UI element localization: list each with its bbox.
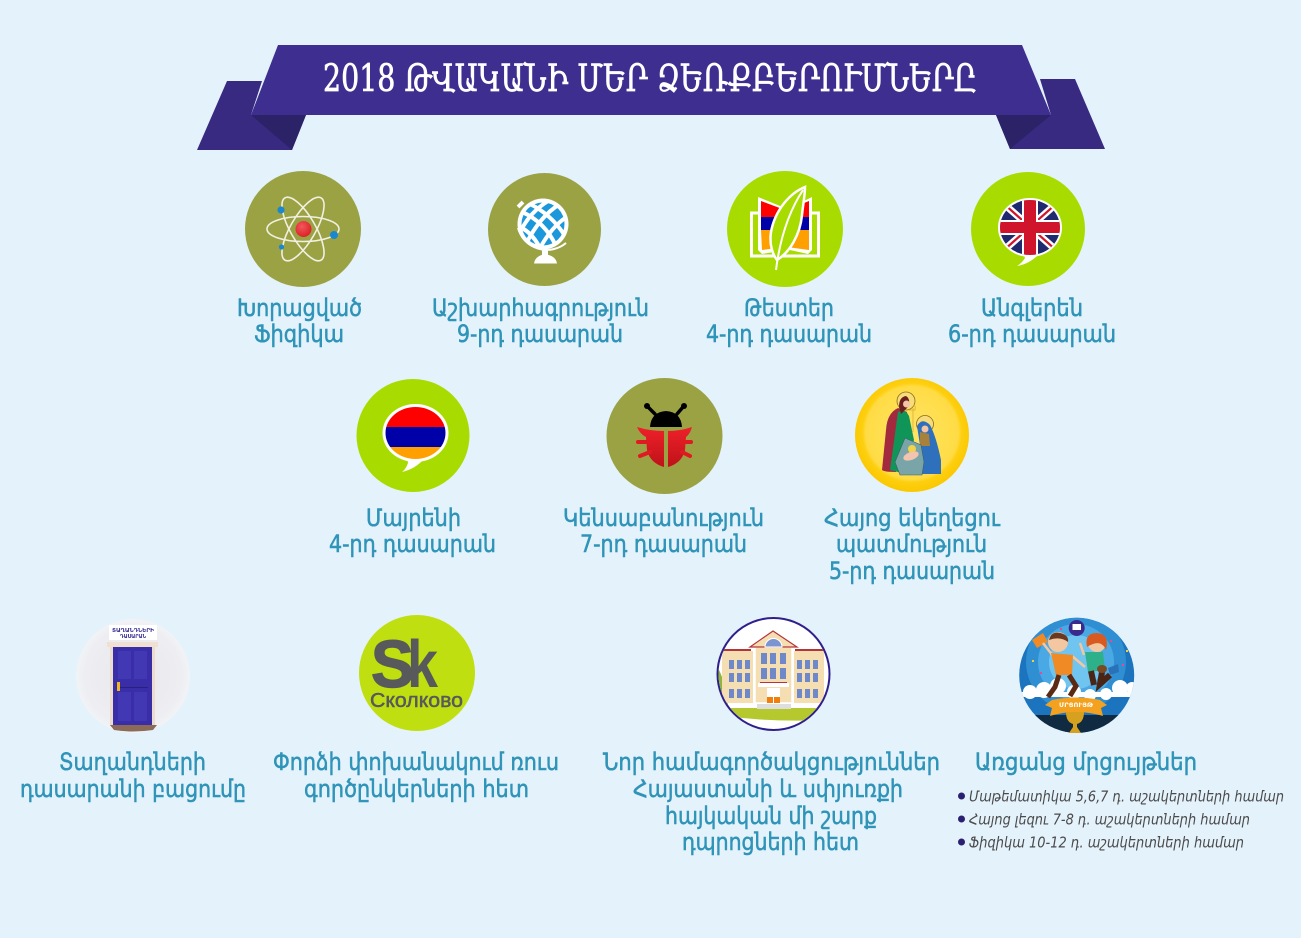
icon: door: ԴԱՍԱՐԱՆ [120,634,146,640]
icon: Skolkovo logo [359,615,475,731]
label: Կենսաբանություն [563,504,764,532]
bullet list: Ֆիզիկա 10-12 դ. աշակերտների համար [969,834,1244,852]
icon: British flag speech bubble [971,172,1085,286]
label [563,504,764,558]
label: 6-րդ դասարան [948,320,1116,348]
icon: school building [718,618,830,730]
item: Skolkovo exchange [273,615,559,803]
item: geography [432,173,649,348]
label: Աշխարհագրություն [432,294,649,322]
title banner [197,45,1105,150]
label [20,748,246,803]
label: Նոր համագործակցություններ [603,748,940,776]
label: հայկական մի շարք [665,802,877,830]
label [273,748,559,803]
item: talent class [20,619,246,803]
label: Մայրենի [366,504,461,532]
label: Թեստեր [744,294,834,322]
title: 2018 ԹՎԱԿԱՆԻ ՄԵՐ ՁԵՌՔԲԵՐՈՒՄՆԵՐԸ [323,57,977,100]
label: Փորձի փոխանակում ռուս [273,748,559,776]
item: mother tongue [329,379,496,558]
label: Ֆիզիկա [254,320,344,348]
label: պատմություն [836,530,987,558]
label: Անգլերեն [981,294,1083,322]
item: church history [824,378,1000,585]
label: Տաղանդների [59,748,206,776]
label: դասարանի բացումը [20,775,246,803]
label: գործընկերների հետ [304,775,529,803]
icon: book and feather [727,171,843,287]
icon: holy family [855,378,969,492]
item: online competitions [958,612,1284,852]
item: texts [706,171,872,348]
item: English [948,172,1116,348]
label: 4-րդ դասարան [329,530,496,558]
icon: door [76,619,190,733]
label [603,748,940,856]
label [706,294,872,348]
icon: Skolkovo logo: k [407,627,439,702]
label: 7-րդ դասարան [580,530,747,558]
icon: jumping kids: ՄՐՑՈՒՅԹ [1059,701,1093,709]
label: դպրոցների հետ [682,828,859,856]
icon: Armenian flag speech bubble [356,379,470,492]
icon: ladybug [606,378,722,494]
heading: Առցանց մրցույթներ [975,748,1197,776]
label: Հայոց եկեղեցու [824,504,1000,532]
item: advanced physics [237,171,362,348]
bullet list: Հայոց լեզու 7-8 դ. աշակերտների համար [969,810,1250,828]
icon: globe [488,173,601,286]
icon: jumping kids [1018,612,1138,735]
icon: door: ՏԱՂԱՆԴՆԵՐԻ [112,628,155,634]
label [948,294,1116,348]
label: Խորացված [237,294,362,322]
label [237,294,362,348]
label [824,504,1000,585]
label: 4-րդ դասարան [706,320,872,348]
icon: Skolkovo logo: S [371,627,414,702]
label: 5-րդ դասարան [829,557,995,585]
icon: Skolkovo logo: Сколково [370,690,463,712]
label: 9-րդ դասարան [457,320,623,348]
item: biology [563,378,764,558]
item: new partnerships [603,618,940,856]
label [432,294,649,348]
bullet list [958,788,1284,852]
label [329,504,496,558]
label: Հայաստանի և սփյուռքի [633,775,903,803]
icon: atom [245,171,361,287]
